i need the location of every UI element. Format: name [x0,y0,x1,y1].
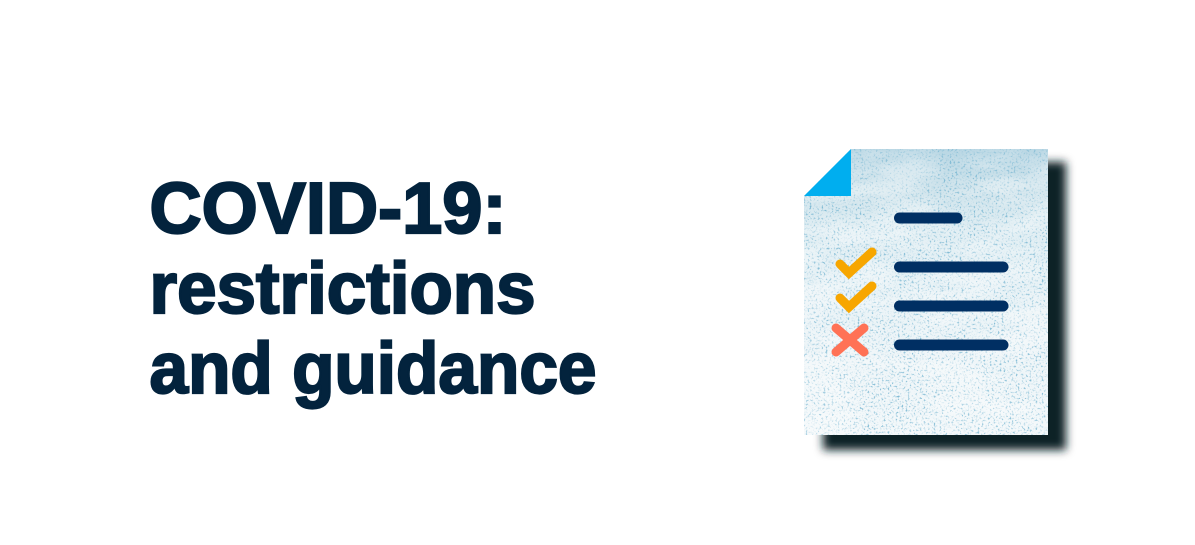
title: restrictions [150,249,536,329]
title [150,169,596,409]
paper sheet [804,149,1048,435]
text lines [900,218,1003,345]
check mark 1 [840,252,872,273]
document shadow [823,162,1066,450]
folded corner [804,149,851,196]
cross mark [836,328,864,352]
icon: checklist document [804,149,1066,450]
check mark 2 [840,286,872,307]
title: and guidance [150,329,596,409]
title: COVID-19: [150,169,506,249]
